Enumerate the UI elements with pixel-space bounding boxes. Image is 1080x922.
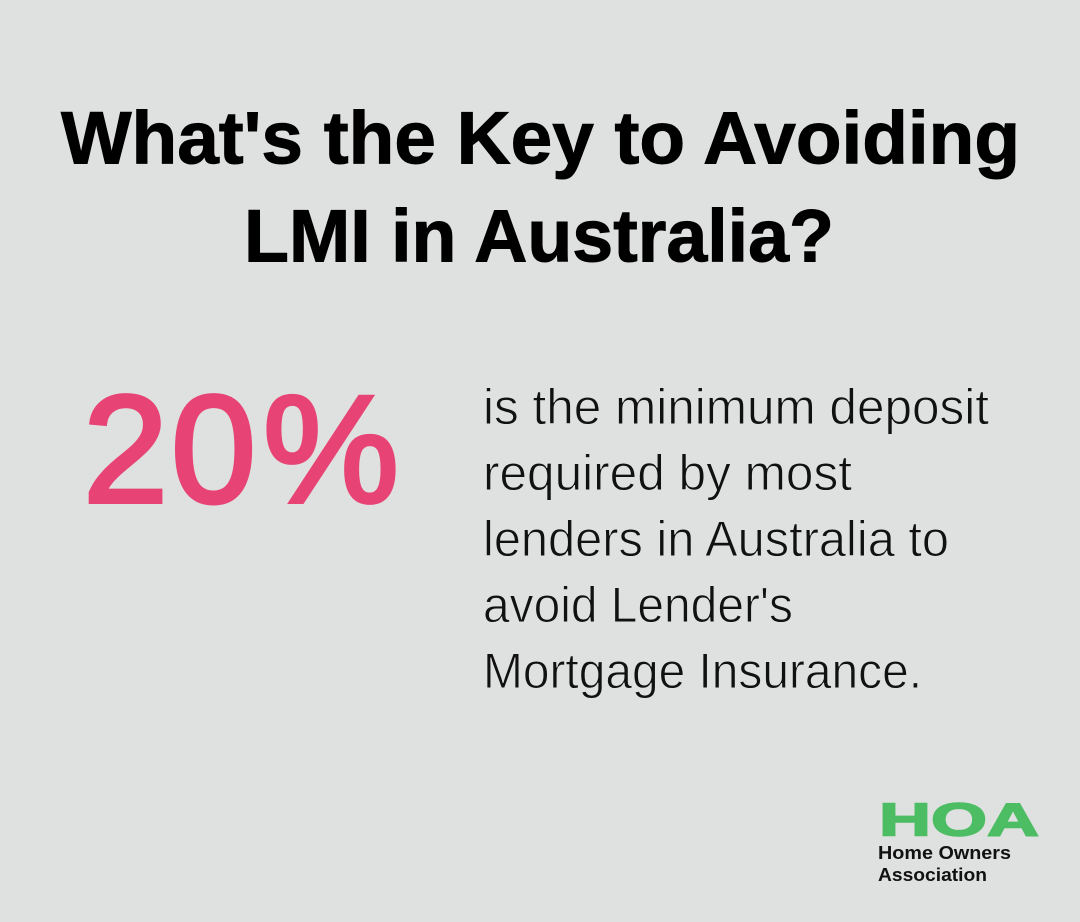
title: What's the Key to Avoiding <box>61 96 1020 180</box>
statistic description: lenders in Australia to <box>483 511 949 567</box>
statistic description: required by most <box>483 445 852 501</box>
title <box>61 96 1020 278</box>
statistic description: is the minimum deposit <box>483 379 989 435</box>
logo wordmark: Association <box>878 864 987 885</box>
logo: Home Owners Association <box>878 794 1039 885</box>
logo mark: HOA: HOA <box>879 794 1039 846</box>
logo wordmark <box>878 842 1011 885</box>
statistic: 20%: 20% <box>83 364 399 535</box>
logo wordmark: Home Owners <box>878 842 1011 863</box>
statistic description: avoid Lender's <box>483 577 793 633</box>
title: LMI in Australia? <box>244 194 834 278</box>
statistic description <box>483 379 989 699</box>
statistic description: Mortgage Insurance. <box>483 643 922 699</box>
